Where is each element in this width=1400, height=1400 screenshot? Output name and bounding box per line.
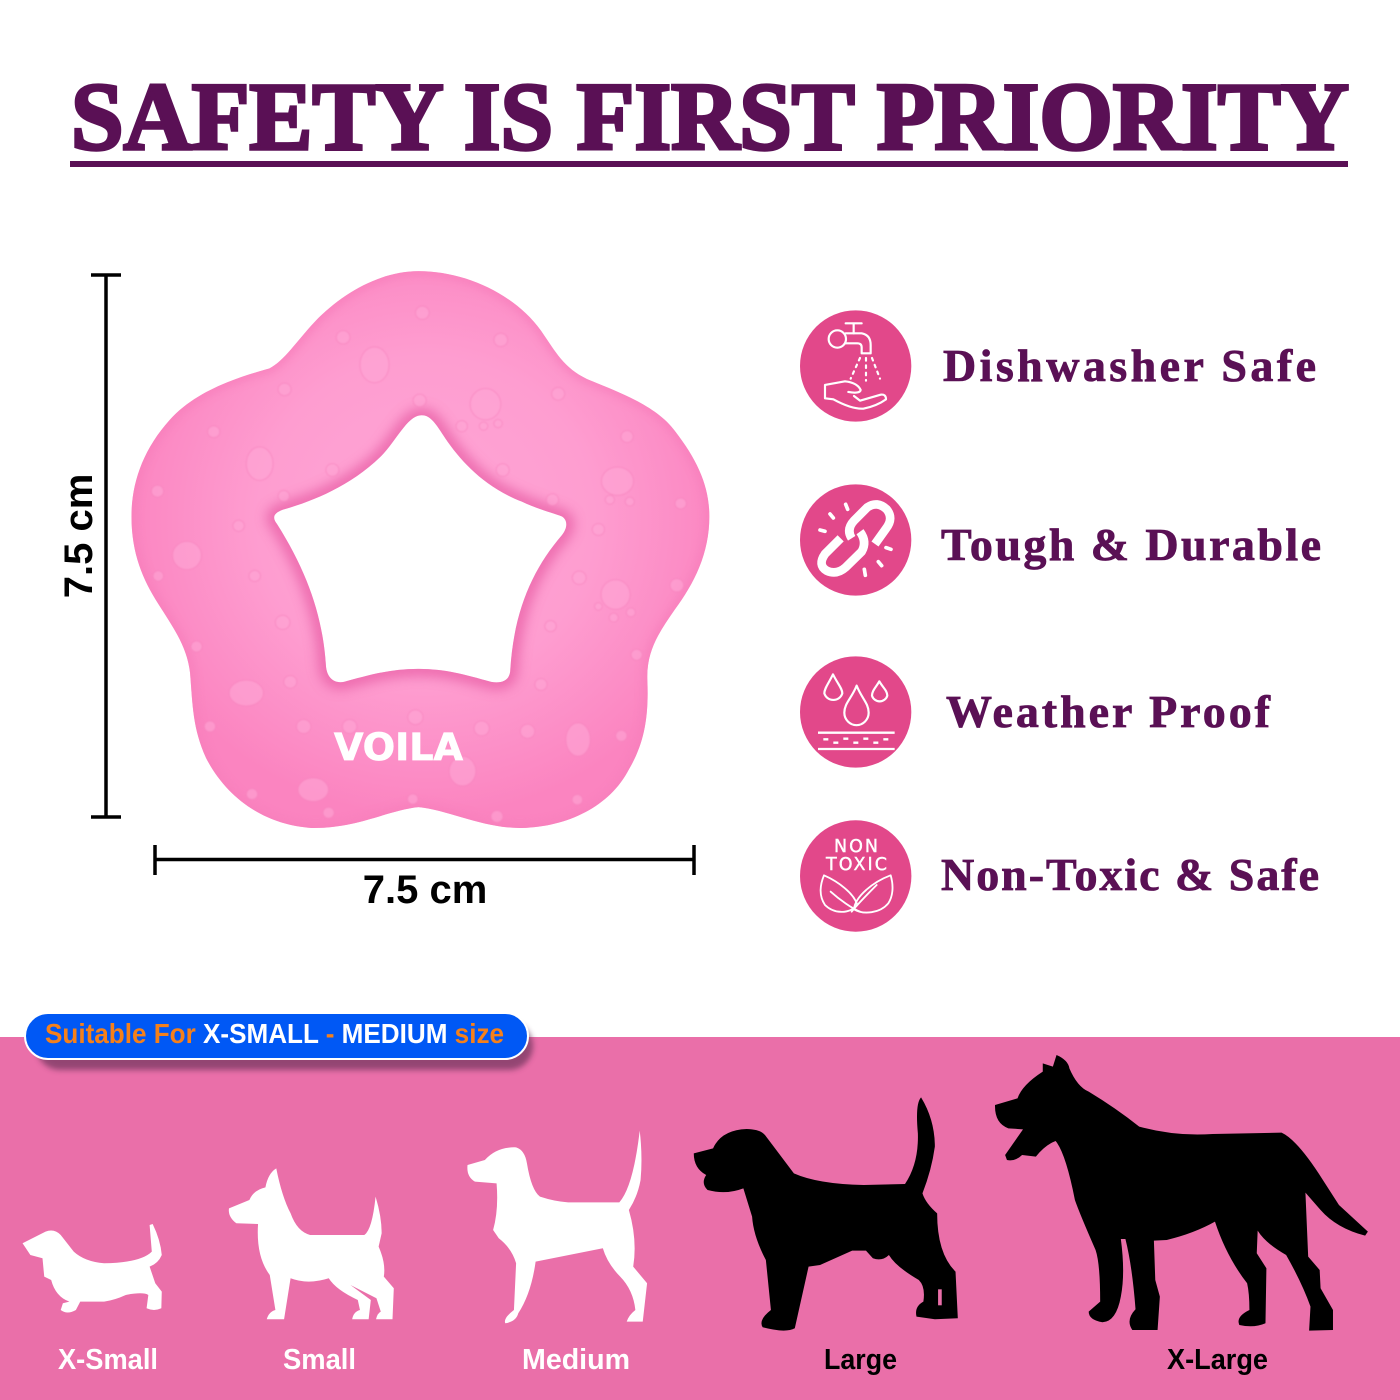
panel: dog size band [0, 1037, 1400, 1400]
brand text on toy: VOILA [334, 726, 463, 769]
label: Medium [522, 1344, 630, 1376]
icon: non toxic leaves: NON [834, 837, 878, 857]
label: Small [283, 1344, 356, 1376]
height dimension: 7.5 cm [57, 474, 101, 598]
label: Dishwasher Safe [943, 340, 1316, 391]
label: Weather Proof [946, 686, 1271, 737]
height dimension [57, 275, 121, 817]
label: Tough & Durable [941, 519, 1321, 570]
dog: large [694, 1097, 958, 1376]
dog: x-large [995, 1055, 1368, 1376]
label: Large [824, 1344, 897, 1376]
product: pink star ring toy [131, 271, 709, 828]
feature: weather proof [800, 656, 1271, 768]
dog: small [229, 1168, 394, 1376]
feature: tough and durable [800, 484, 1321, 596]
title: SAFETY IS FIRST PRIORITY [71, 63, 1349, 170]
badge: suitable size [25, 1013, 533, 1070]
dog: x-small [23, 1224, 162, 1376]
icon: water drops on surface [800, 656, 911, 768]
icon: chain link [800, 484, 911, 596]
label: Non-Toxic & Safe [941, 849, 1319, 900]
icon: non toxic leaves [800, 820, 911, 932]
feature: non-toxic and safe [800, 820, 1319, 932]
feature: dishwasher safe [800, 310, 1316, 422]
dog: medium [467, 1131, 647, 1376]
width dimension: 7.5 cm [363, 868, 487, 912]
badge: suitable size: Suitable For X-SMALL - MEDIUM size [45, 1018, 504, 1049]
icon: faucet and hand [800, 310, 911, 422]
label: X-Large [1167, 1344, 1268, 1376]
icon: non toxic leaves: TOXIC [825, 855, 887, 875]
label: X-Small [58, 1344, 158, 1376]
width dimension [155, 845, 694, 912]
